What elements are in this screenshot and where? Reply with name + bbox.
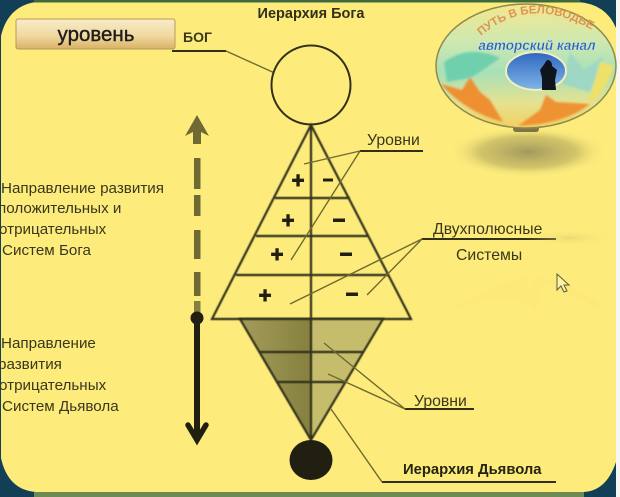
label: Devil hierarchy: Иерархия Дьявола [403, 462, 542, 478]
label: two-pole systems [290, 221, 556, 304]
text: positive and negative systems direction: положительных и [0, 200, 121, 217]
title: Иерархия Бога [258, 6, 365, 22]
signs: plus and minus: + [292, 168, 304, 193]
button: level [16, 19, 175, 49]
text: negative systems direction: отрицательных [0, 377, 107, 394]
icon: mouse cursor [557, 274, 569, 292]
inverted pyramid: Devil hierarchy [240, 319, 383, 440]
label: God: БОГ [183, 29, 212, 45]
label: levels upper: Уровни [367, 132, 420, 149]
label: Devil hierarchy [331, 409, 556, 482]
slide bottom band [34, 492, 584, 497]
label: levels upper [291, 132, 423, 260]
button: level: уровень [58, 23, 134, 46]
text: negative systems direction: Систем Дьявола [2, 398, 119, 415]
pyramid: God hierarchy [212, 125, 411, 319]
logo: channel badge: ПУТЬ В БЕЛОВОДЬЕ [476, 5, 595, 36]
text: positive and negative systems direction: Систем Бога [2, 242, 92, 259]
label: levels lower [324, 343, 474, 410]
signs: plus and minus: + [271, 242, 283, 267]
slide top band [34, 0, 580, 2]
signs: plus and minus: + [259, 283, 271, 308]
label: two-pole systems: Системы [456, 247, 522, 264]
arrow: downward solid [188, 312, 206, 440]
circle: God [272, 46, 350, 124]
label: two-pole systems: Двухполюсные [433, 221, 543, 238]
arrow: upward dashed [185, 115, 209, 315]
signs: plus and minus: + [282, 208, 294, 233]
signs: plus and minus [259, 168, 358, 308]
text: positive and negative systems direction: Направление развития [1, 180, 164, 197]
faint background glows [450, 229, 615, 312]
circle: Devil [290, 440, 332, 480]
logo: channel badge: авторский канал [478, 38, 596, 53]
text: negative systems direction: Направление [1, 335, 96, 352]
label: levels lower: Уровни [414, 393, 467, 410]
text: positive and negative systems direction: отрицательных [0, 221, 107, 238]
logo: channel badge [435, 3, 617, 174]
label: God [172, 29, 288, 79]
